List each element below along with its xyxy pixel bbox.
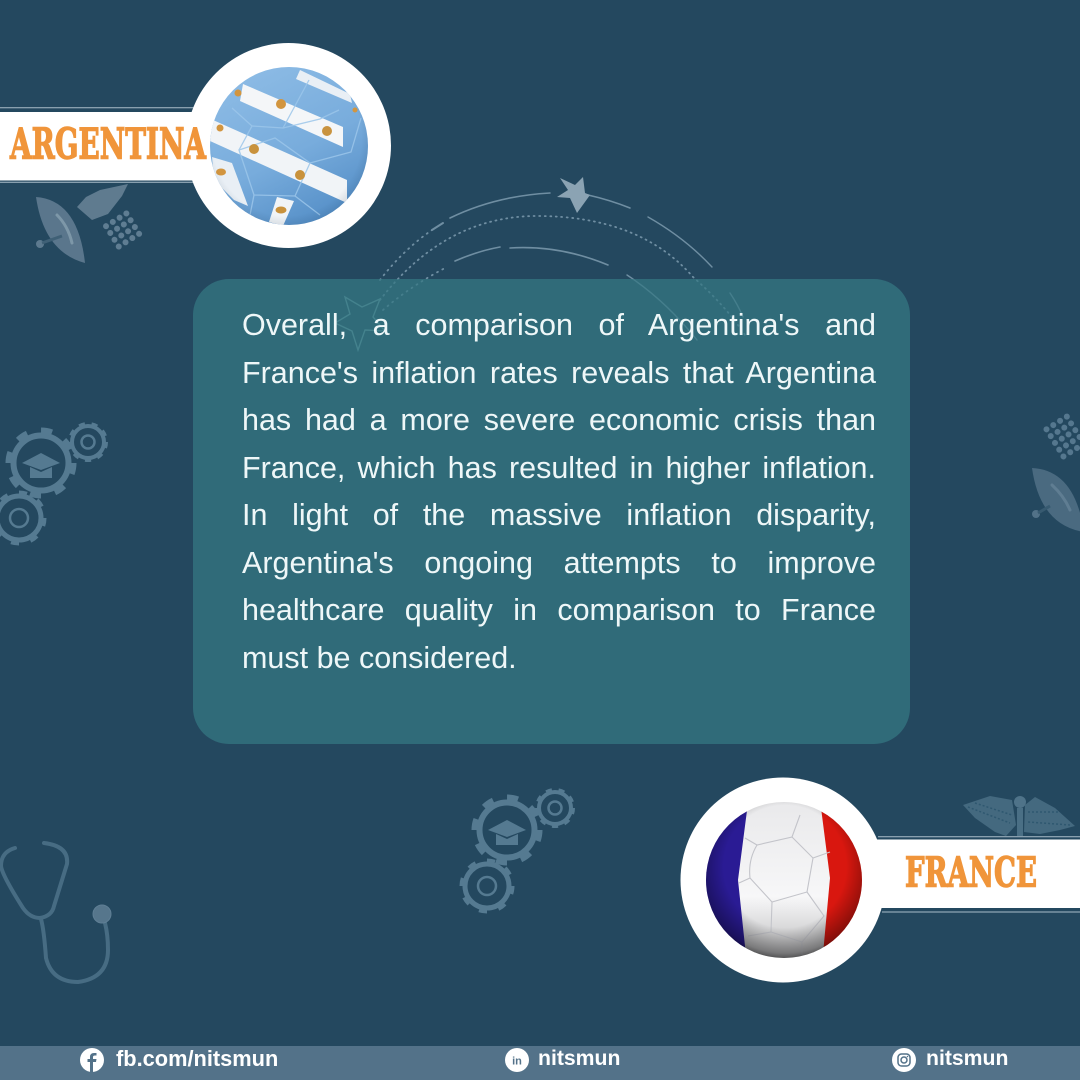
icon: linkedin bbox=[505, 1048, 529, 1072]
France ribbon lines bbox=[878, 837, 1080, 912]
text block: summary paragraph: healthcare quality in comparison to France bbox=[242, 593, 876, 627]
icon: instagram bbox=[892, 1048, 916, 1072]
icon: caduceus bbox=[963, 796, 1075, 836]
icon: stethoscope bbox=[1, 843, 111, 982]
icon: filled star bbox=[557, 177, 590, 213]
panel: summary bbox=[193, 279, 910, 744]
France header bbox=[680, 778, 1080, 982]
icon: outlined star bbox=[335, 297, 385, 350]
Argentina ribbon bbox=[0, 112, 210, 180]
text block: summary paragraph: France's inflation rates reveals that Argentina bbox=[242, 356, 876, 390]
text: facebook handle: fb.com/nitsmun bbox=[116, 1046, 278, 1071]
text block: summary paragraph: must be considered. bbox=[242, 640, 517, 674]
Argentina ribbon lines bbox=[0, 108, 200, 182]
icon: gears centre bbox=[462, 790, 573, 911]
Argentina ball ring bbox=[186, 43, 391, 248]
Argentina title: ARGENTINA bbox=[9, 120, 207, 168]
France ribbon bbox=[870, 840, 1080, 908]
text: linkedin handle: nitsmun bbox=[538, 1047, 620, 1070]
text block: summary paragraph: has had a more severe economic crisis than bbox=[242, 403, 876, 437]
icon: linkedin: in bbox=[512, 1056, 522, 1068]
footer bar bbox=[0, 1046, 1080, 1080]
icon: satellite right bbox=[1032, 412, 1080, 532]
icon: facebook bbox=[80, 1048, 104, 1072]
text block: summary paragraph: In light of the massive inflation disparity, bbox=[242, 498, 876, 532]
text block: summary paragraph bbox=[242, 308, 876, 674]
text block: summary paragraph: France, which has resulted in higher inflation. bbox=[242, 450, 876, 484]
icon: France football bbox=[706, 802, 862, 958]
icon: Argentina football bbox=[210, 67, 368, 225]
text: instagram handle: nitsmun bbox=[926, 1047, 1008, 1070]
icon: gears left bbox=[0, 424, 106, 543]
icon: satellite left bbox=[36, 184, 143, 263]
text block: summary paragraph: Argentina's ongoing attempts to improve bbox=[242, 546, 876, 580]
France ball ring bbox=[680, 778, 886, 982]
text block: summary paragraph: Overall, a comparison of Argentina's and bbox=[242, 308, 876, 342]
arcs and stars bbox=[380, 193, 745, 340]
